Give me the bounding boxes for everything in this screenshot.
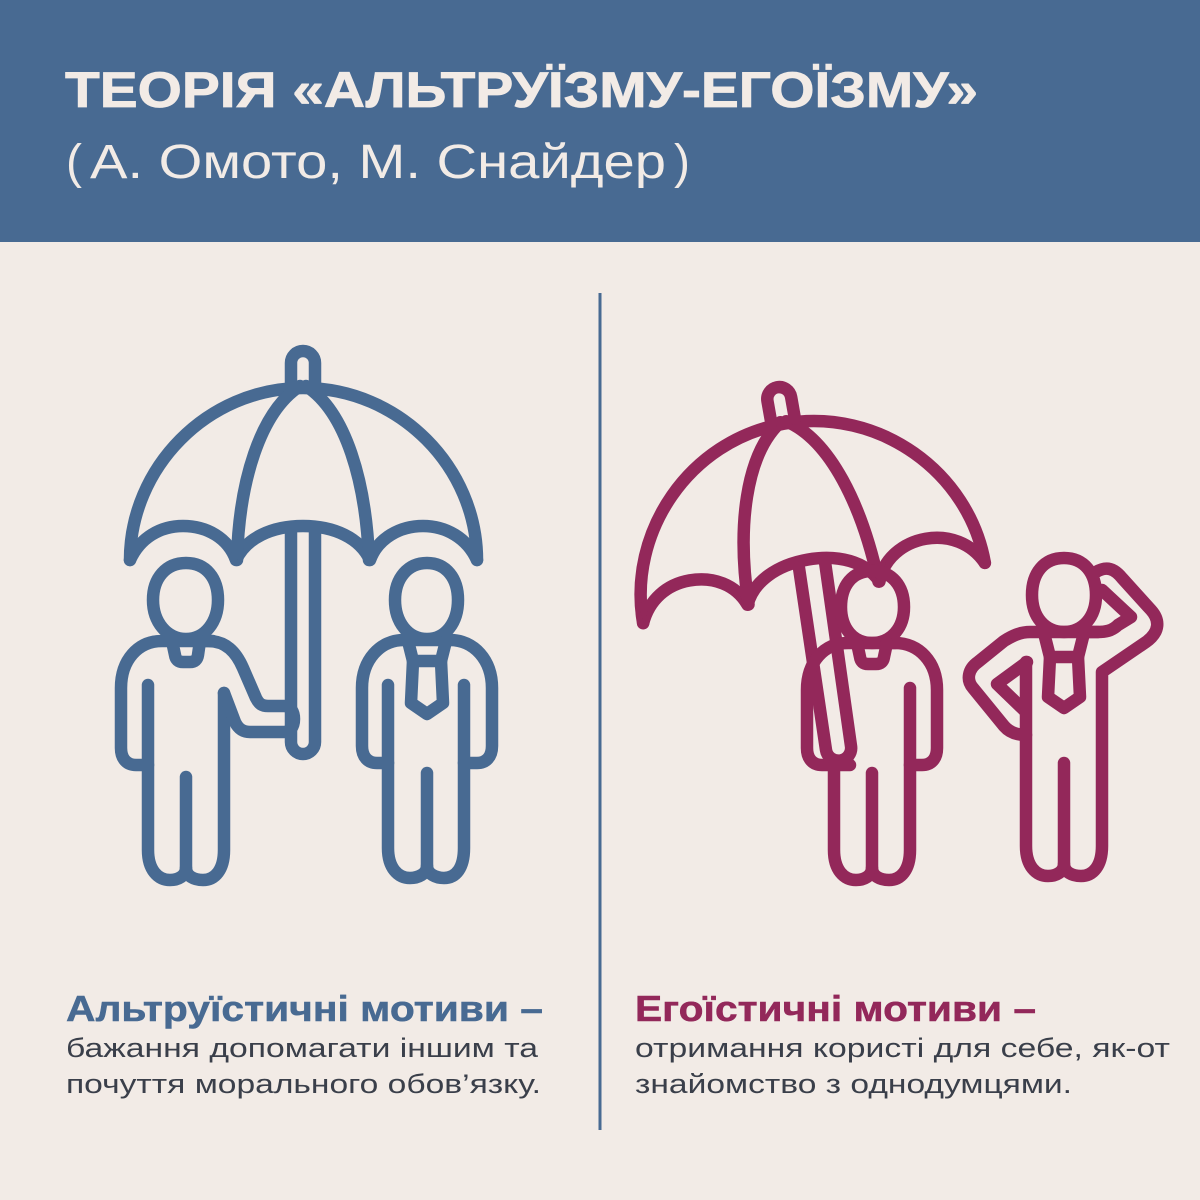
heading: Егоїстичні мотиви –: [635, 988, 1036, 1029]
icon: altruistic, two people sharing an umbrella: [121, 351, 492, 880]
person: right, with tie: [362, 563, 492, 878]
description: бажання допомагати іншим та: [66, 1033, 539, 1063]
text block: altruistic motives: [66, 988, 543, 1099]
icon: egoistic, one person under umbrella and one left outside: [605, 357, 1157, 880]
description: знайомство з однодумцями.: [635, 1069, 1072, 1099]
umbrella canopy: [605, 357, 987, 625]
person: left, holding the umbrella: [121, 563, 294, 880]
central divider: [598, 293, 602, 1130]
description: [635, 1033, 1170, 1099]
description: почуття морального обов’язку.: [66, 1069, 541, 1099]
umbrella shaft: [799, 562, 851, 761]
subtitle: (: [66, 136, 82, 189]
header banner: [0, 0, 1200, 242]
umbrella canopy: [128, 351, 479, 562]
description: [66, 1033, 541, 1099]
person: sheltered under the umbrella: [807, 571, 937, 880]
subtitle: ): [674, 136, 690, 189]
subtitle: А. Омото, М. Снайдер: [90, 136, 666, 189]
title: ТЕОРІЯ «АЛЬТРУЇЗМУ-ЕГОЇЗМУ»: [65, 62, 978, 118]
person: outside the umbrella, scratching head: [969, 558, 1157, 876]
description: отримання користі для себе, як-от: [635, 1033, 1170, 1063]
text block: egoistic motives: [635, 988, 1170, 1099]
umbrella shaft: [291, 530, 315, 754]
heading: Альтруїстичні мотиви –: [66, 988, 543, 1029]
